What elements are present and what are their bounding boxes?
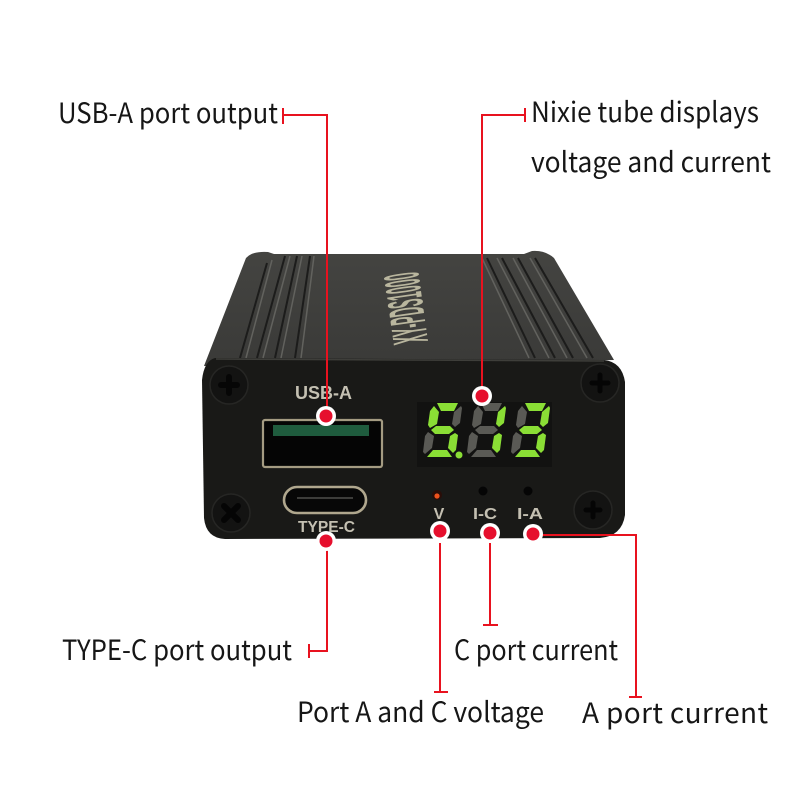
callout: C port current xyxy=(454,523,618,669)
device top face xyxy=(204,251,614,366)
label: Nixie tube displays voltage and current xyxy=(531,91,771,181)
screw: bottom right xyxy=(574,491,612,529)
leader line: voltage xyxy=(434,543,448,692)
leader line: display xyxy=(482,108,525,396)
label: C port current: C port current xyxy=(454,629,618,669)
marker: A current xyxy=(523,524,543,544)
callout: A port current xyxy=(523,524,768,732)
leader line: Type-C xyxy=(309,541,327,658)
USB-A port xyxy=(263,420,382,467)
label: TYPE-C port output: TYPE-C port output xyxy=(62,629,292,669)
silkscreen: I-C: I-C xyxy=(473,506,498,523)
Type-C port xyxy=(284,487,366,513)
silkscreen: TYPE-C: TYPE-C xyxy=(298,519,355,536)
decimal point xyxy=(456,452,462,458)
seven-segment display xyxy=(417,402,552,467)
screw: bottom left xyxy=(212,494,250,532)
digit 1 xyxy=(467,403,506,457)
label: Nixie tube displays voltage and current: Nixie tube displays xyxy=(531,91,759,131)
leader line: C current xyxy=(483,543,498,625)
label: A port current: A port current xyxy=(582,692,768,732)
text: XY-PDS1000 xyxy=(374,269,439,347)
callout: TYPE-C port output xyxy=(62,531,336,669)
digit 5 xyxy=(423,403,462,457)
screw: top left xyxy=(210,366,248,404)
silkscreen: USB-A: USB-A xyxy=(295,383,352,403)
label: Nixie tube displays voltage and current: voltage and current xyxy=(531,141,771,181)
marker: Type-C xyxy=(316,531,336,551)
LED: A current, off xyxy=(524,486,532,496)
top edge highlight xyxy=(216,359,604,361)
leader line: A current xyxy=(533,535,642,697)
digit 3 xyxy=(511,403,550,457)
label: USB-A port output: USB-A port output xyxy=(58,92,278,132)
silkscreen: V: V xyxy=(434,506,445,523)
silkscreen: I-A: I-A xyxy=(517,506,544,523)
LED: voltage, lit red xyxy=(432,490,442,500)
marker: voltage xyxy=(430,521,450,541)
callout: Nixie tube display xyxy=(472,91,771,406)
label: Port A and C voltage: Port A and C voltage xyxy=(297,691,544,731)
device: aluminium enclosure with ports and display xyxy=(202,251,625,539)
screw: top right xyxy=(581,364,619,402)
callout: USB-A port output xyxy=(58,92,336,426)
marker: USB-A xyxy=(316,406,336,426)
marker: display xyxy=(472,386,492,406)
heat-sink ridges, left xyxy=(240,256,314,358)
device front face xyxy=(202,358,625,539)
leader line: USB-A xyxy=(283,108,327,416)
LED: C current, off xyxy=(478,486,488,496)
marker: C current xyxy=(480,523,500,543)
heat-sink ridges, right xyxy=(482,258,593,358)
callout: Port A and C voltage xyxy=(297,521,544,731)
